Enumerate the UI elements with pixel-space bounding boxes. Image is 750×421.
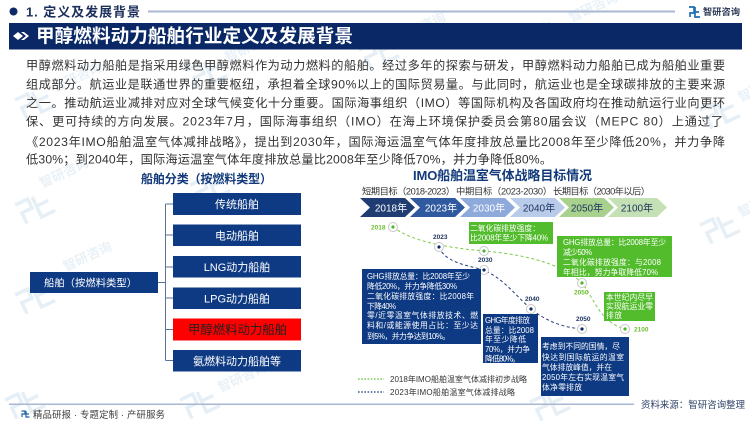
callout: green 2050: 年相比，努力争取降低70% [563,267,658,277]
tree diagram: ship classification [30,193,301,372]
box: methanol ships highlighted [173,318,301,340]
box: LPG ships: LPG动力船舶 [204,292,270,306]
period labels: 中期目标（2023-2030） [456,186,552,196]
chevron 2040: 2040年 [523,202,555,214]
text: 智研咨询 [50,59,104,95]
legend item: 2023 strategy: 2023年IMO船舶温室气体减排战略 [390,387,515,397]
timeline chevrons [360,198,667,217]
chevron 2040 [510,198,565,217]
callout: navy 2030: 料和/或能源使用占比：至少达 [367,320,478,330]
milestone 2040 navy: 2040 [525,296,540,303]
text: 智研咨询 [215,359,269,395]
callout: green 2050: 减少50% [563,247,592,257]
body text: 《2023年IMO船舶温室气体减排战略》，提出到2030年，国际海运温室气体年度排放总量比2008年至少降低20%，并力争降 [26,134,725,149]
callout: navy 2030: 零/近零温室气体排放技术、燃 [367,310,478,320]
callout: navy 2040: 降低80%。 [485,354,520,364]
heading: IMO strategy: IMO船舶温室气体战略目标情况 [413,168,592,183]
root box: 船舶（按燃料类型） [44,276,137,290]
milestone 2050 navy: 2050 [576,316,591,323]
callout: navy 2040: 年至少降低 [485,334,526,344]
footer slogan: 精品研报 · 专题定制 · 产研服务 [33,409,165,420]
callout: navy 2040: 70%，并力争 [485,344,530,354]
legend [358,374,527,397]
text: 智研咨询 [394,9,448,45]
chevron 2030 [460,198,515,217]
milestone 2050 green [574,278,589,296]
box: LPG ships [173,288,301,309]
milestone 2030 navy: 2030 [478,257,493,264]
text: 智研咨询 [61,238,114,274]
chevron 2023: 2023年 [425,202,457,214]
box: methanol ships highlighted: 甲醇燃料动力船舶 [188,322,287,337]
callout: navy 2030: 下降40% [367,301,396,311]
milestone 2040 navy [525,296,540,314]
body text: 保、更可持续的方向发展。2023年7月，国际海事组织（IMO）在海上环境保护委员会第80届会议（MEPC 80）上通过了 [26,114,723,128]
chevron 2100 [608,198,667,217]
callout: navy 2050: 体净零排放 [542,382,582,392]
brand logo: 智研咨询 [703,6,740,17]
body text: 低30%；到2040年，国际海运温室气体年度排放总量比2008年至少降低70%，并力争降低80%。 [26,152,552,166]
box: traditional ships: 传统船舶 [215,197,259,211]
body text: 甲醇燃料动力船舶是指采用绿色甲醇燃料作为动力燃料的船舶。经过多年的探索与研发，甲醇燃料动力船舶已成为船舶业重要 [26,58,725,72]
milestone 2050 navy [576,316,591,334]
green pathway [393,227,625,329]
milestone 2030 navy [478,257,493,274]
callout: green 2030 [469,222,553,244]
callout: navy 2050: 气体排放峰值，并在 [542,362,612,372]
box: LNG ships [173,256,301,278]
box: electric ships: 电动船舶 [215,228,259,242]
callout: green 2100: 实现航运业零 [606,301,653,311]
callout: navy 2050: 快达到国际航运的温室 [542,352,624,362]
milestone 2023 navy [433,234,448,252]
title bar: 甲醇燃料动力船舶行业定义及发展背景 [36,26,353,46]
milestone 2100 green: 2100 [634,326,649,334]
box: ammonia ships [173,350,301,372]
callout: navy 2030 [362,269,481,344]
body text [26,58,725,166]
callout: green 2100 [604,292,655,321]
chevron 2018 [360,198,415,217]
text: 智研咨询 [37,155,91,191]
milestone 2100 green [620,324,649,334]
callout: navy 2030: 二氧化碳排放强度：比2008年 [367,291,474,301]
body text: 组成部分。航运业是联通世界的重要枢纽，承担着全球90%以上的国际贸易量。与此同时，航运业也是全球碳排放的主要来源 [26,76,725,92]
callout: green 2030: 二氧化碳排放强度： [470,223,540,233]
root box [30,272,158,293]
box: electric ships [173,224,301,246]
box: traditional ships [173,193,301,215]
milestone 2050 green: 2050 [574,290,589,296]
callout: navy 2040 [483,314,538,364]
callout: green 2050 [557,236,672,277]
callout: green 2050: 二氧化碳排放强度：与2008 [563,257,661,267]
callout: green 2100: 本世纪内尽早 [606,292,653,302]
chevron 2050 [559,198,614,217]
milestone 2018 green [371,222,398,232]
period labels: 长期目标（2030年以后） [553,186,650,196]
box: ammonia ships: 氨燃料动力船舶等 [193,354,281,368]
milestone 2023 navy: 2023 [433,234,448,241]
body text: 之一。推动航运业减排对应对全球气候变化十分重要。国际海事组织（IMO）等国际机构及各国政府均在推动航运行业向更环 [26,95,725,110]
chevron 2050: 2050年 [571,202,603,214]
navy pathway [439,247,582,329]
heading: ship classification: 船舶分类（按燃料类型） [141,171,272,186]
callout: green 2050: GHG排放总量：比2008年至少 [563,237,666,247]
callout: navy 2030: 到5%，并力争达到10%。 [367,331,450,341]
title bar [9,23,742,50]
callout: navy 2040: 总量：比2008 [485,325,534,335]
chevron 2018: 2018年 [375,202,407,214]
callout: navy 2030: 降低20%，并力争降低30% [367,281,457,291]
section heading: 1. 定义及发展背景 [26,4,140,20]
milestone 2018 green: 2018 [371,224,386,232]
brand logo [689,6,740,17]
chevron 2030: 2030年 [473,202,505,214]
period labels [362,186,650,196]
callout: navy 2040: GHG年度排放 [485,315,530,325]
callout: navy 2030: GHG排放总量：比2008年至少 [367,271,470,281]
legend item: 2018 strategy: 2018年IMO船舶温室气体减排初步战略 [390,374,527,384]
callout: navy 2050: 2050年左右实现温室气 [542,372,624,382]
source note: 资料来源：智研咨询整理 [641,399,746,410]
chevron 2023 [410,198,465,217]
callout: green 2030: 比2008年至少下降40% [470,232,548,242]
callout: green 2100: 排放 [606,310,622,320]
callout: navy 2050 [541,337,629,396]
milestone green mid [480,246,488,256]
period labels: 短期目标（2018-2023） [362,186,455,196]
callout: navy 2050: 考虑到不同的国情，尽 [542,341,620,351]
text: 智研咨询 [222,29,276,65]
chevron 2100: 2100年 [621,202,653,214]
box: LNG ships: LNG动力船舶 [204,260,270,274]
